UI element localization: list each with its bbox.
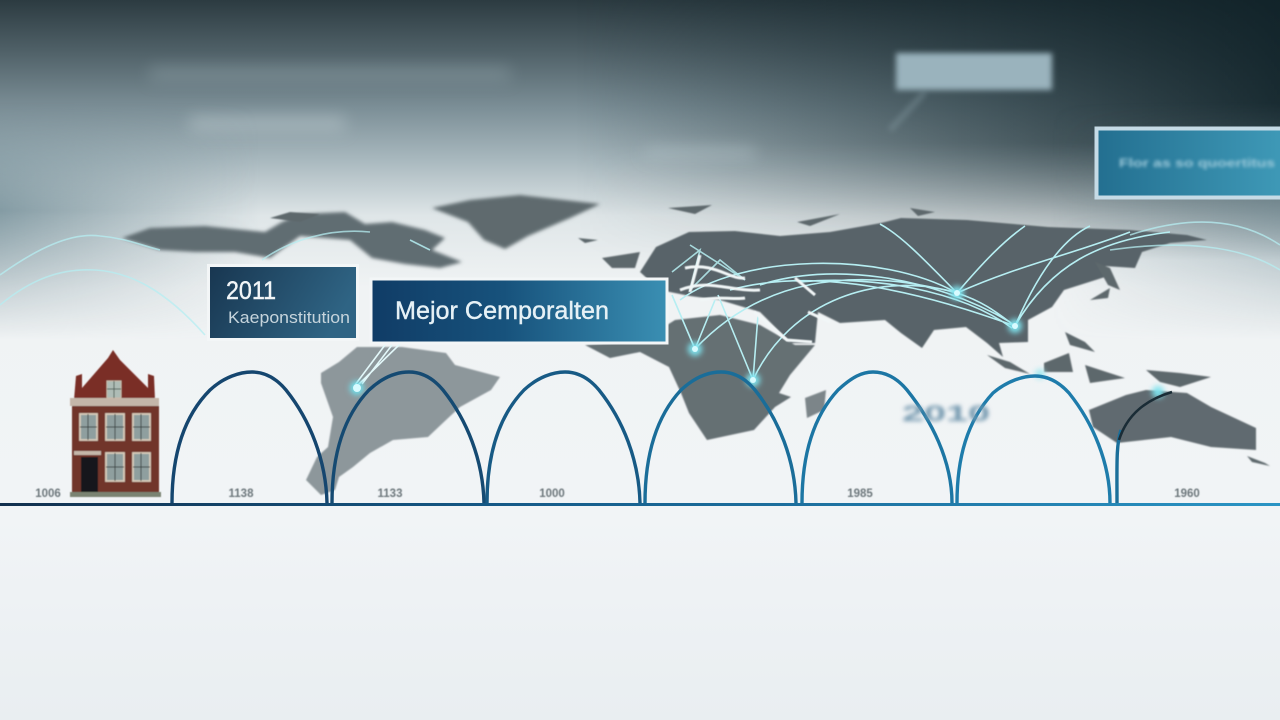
year labels: 1000 [539, 488, 565, 500]
house roof [74, 350, 155, 400]
gable window [107, 381, 121, 398]
house door [74, 451, 101, 455]
year labels: 1138 [229, 488, 254, 500]
year labels: 1960 [1174, 488, 1200, 500]
map: Eurasia [640, 218, 1207, 357]
timeline baseline [0, 503, 1280, 506]
glowing network nodes [350, 286, 1164, 398]
callout: 2011: Kaeponstitution [228, 308, 350, 327]
map: South America [306, 347, 500, 495]
white coastline highlights [680, 255, 830, 342]
year labels: 1985 [847, 488, 873, 500]
blurred arch label: 2010 [902, 401, 990, 426]
callout: 2011: 2011 [226, 277, 276, 305]
icon: red brick house [70, 350, 161, 497]
year labels: 1006 [35, 488, 61, 500]
map: Australia [1089, 390, 1256, 450]
timeline arches [172, 372, 1172, 503]
year labels [35, 488, 1200, 500]
callout: top right: Flor as so quoertitus [1119, 156, 1275, 170]
map: Africa [585, 315, 815, 440]
house body [72, 403, 159, 495]
callout: Major Corporation [371, 279, 667, 343]
year labels: 1133 [378, 488, 402, 500]
map: islands [270, 205, 1270, 466]
house windows [80, 414, 150, 481]
network arcs [0, 222, 1280, 385]
callout: Major Corporation: Mejor Cemporalten [395, 297, 609, 325]
world map [122, 195, 1270, 495]
map: North America [122, 212, 462, 268]
map: Greenland [432, 195, 600, 249]
blurred callout: top [890, 53, 1052, 130]
callout: 2011 [208, 266, 358, 340]
callout: top right [1096, 128, 1280, 198]
map: Madagascar [805, 390, 826, 418]
background gradient [0, 0, 1280, 327]
